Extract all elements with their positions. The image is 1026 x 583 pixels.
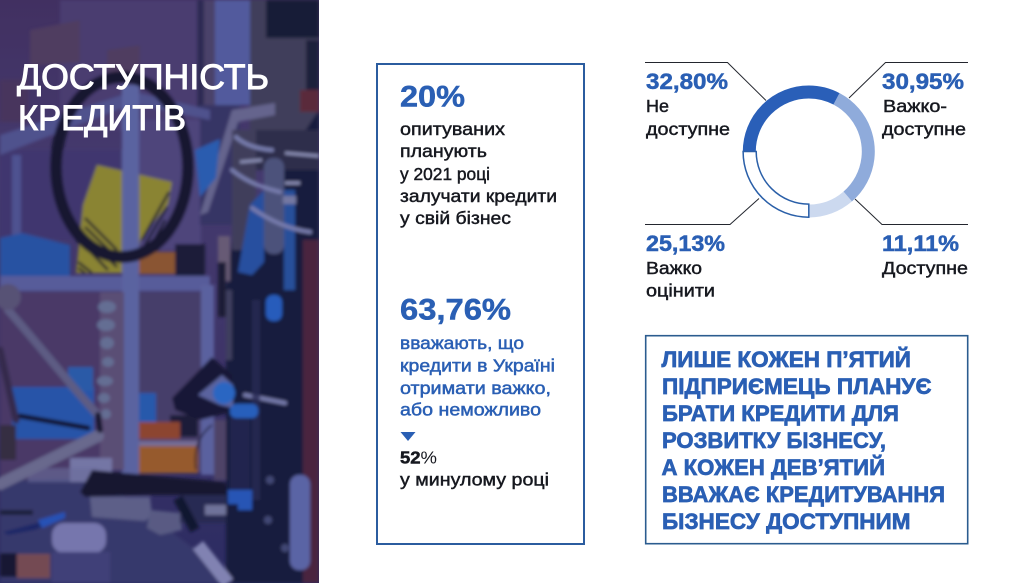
callout: conclusion: А КОЖЕН ДЕВ’ЯТИЙ bbox=[662, 455, 885, 480]
callout: conclusion: БІЗНЕСУ ДОСТУПНИМ bbox=[662, 509, 910, 534]
callout: conclusion: ВВАЖАЄ КРЕДИТУВАННЯ bbox=[662, 482, 945, 507]
label: hard to assess: оцінити bbox=[646, 280, 715, 300]
label: not available: 32,80% bbox=[646, 69, 728, 94]
text block: credit is hard to get: вважають, що bbox=[400, 333, 524, 353]
heading: title bbox=[17, 58, 269, 138]
text block: planning to borrow bbox=[400, 119, 557, 228]
label: not available: Не bbox=[646, 96, 669, 116]
label: hard to access: доступне bbox=[882, 119, 966, 139]
panel: survey stats bbox=[377, 64, 584, 544]
label: hard to assess bbox=[646, 231, 725, 300]
text block: credit is hard to get: отримати важко, bbox=[400, 378, 551, 398]
stat: 20 percent: 20% bbox=[400, 80, 465, 114]
text block: credit is hard to get: кредити в Україні bbox=[400, 356, 555, 376]
leader line: bottom left bbox=[645, 198, 759, 224]
label: not available bbox=[646, 69, 730, 139]
text block: planning to borrow: у 2021 році bbox=[400, 164, 490, 184]
callout: conclusion: РОЗВИТКУ БІЗНЕСУ, bbox=[662, 428, 886, 453]
label: hard to assess: 25,13% bbox=[646, 231, 725, 256]
text block: last year: 52% bbox=[400, 448, 437, 468]
leader line: top right bbox=[849, 62, 968, 98]
text block: planning to borrow: залучати кредити bbox=[400, 186, 557, 206]
label: available bbox=[882, 231, 968, 278]
text block: planning to borrow: планують bbox=[400, 141, 487, 161]
heading: title: ДОСТУПНІСТЬ bbox=[17, 58, 269, 97]
text block: planning to borrow: у свій бізнес bbox=[400, 208, 511, 228]
text block: planning to borrow: опитуваних bbox=[400, 119, 505, 139]
label: hard to access bbox=[882, 69, 966, 139]
label: hard to assess: Важко bbox=[646, 258, 702, 278]
callout: conclusion: ПІДПРИЄМЕЦЬ ПЛАНУЄ bbox=[662, 374, 932, 399]
callout: conclusion: БРАТИ КРЕДИТИ ДЛЯ bbox=[662, 401, 899, 426]
callout: conclusion bbox=[646, 336, 968, 544]
callout: conclusion: ЛИШЕ КОЖЕН П’ЯТИЙ bbox=[662, 347, 911, 372]
heading: title: КРЕДИТІВ bbox=[18, 99, 186, 138]
photo panel: bicycle workshop bbox=[0, 0, 319, 583]
text block: credit is hard to get: або неможливо bbox=[400, 400, 541, 420]
label: not available: доступне bbox=[646, 119, 730, 139]
label: available: 11,11% bbox=[882, 231, 959, 256]
leader line: top left bbox=[645, 62, 766, 100]
stat: 63.76 percent: 63,76% bbox=[400, 294, 511, 326]
label: available: Доступне bbox=[882, 258, 968, 278]
text block: credit is hard to get bbox=[400, 333, 555, 420]
label: hard to access: Важко- bbox=[883, 96, 947, 116]
donut chart bbox=[725, 68, 893, 235]
label: hard to access: 30,95% bbox=[882, 69, 964, 94]
icon: down triangle bbox=[400, 432, 416, 441]
leader line: bottom right bbox=[855, 199, 968, 224]
text block: last year: у минулому році bbox=[400, 470, 549, 490]
text block: last year bbox=[400, 448, 549, 490]
